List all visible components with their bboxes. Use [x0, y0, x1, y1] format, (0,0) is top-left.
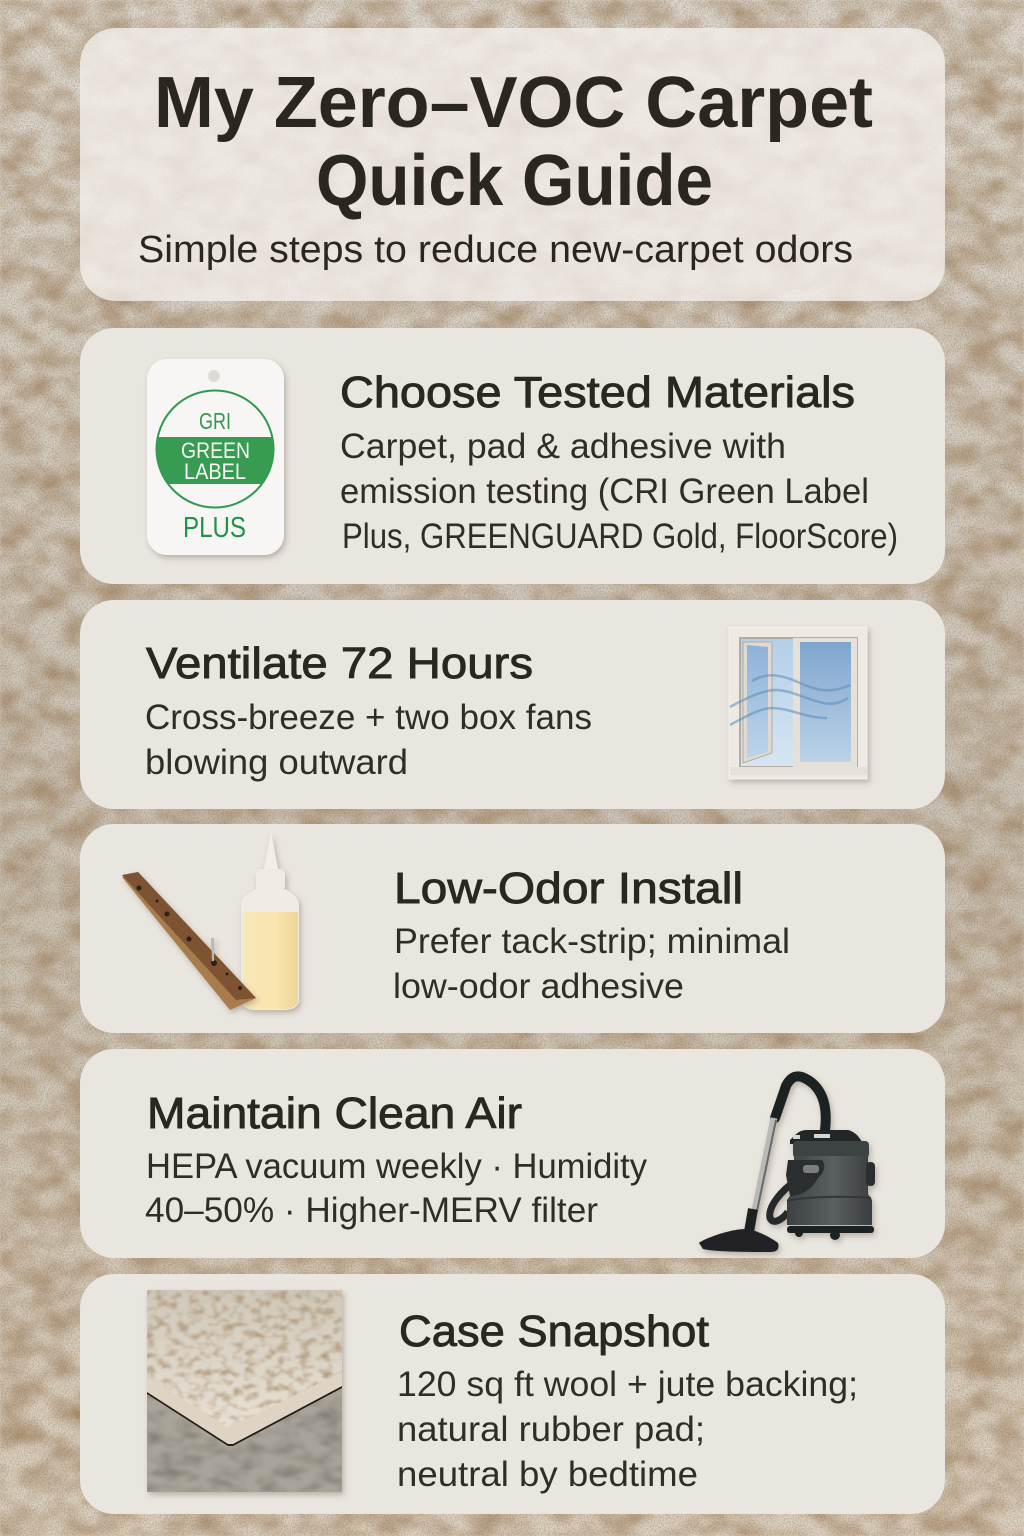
subtitle: Simple steps to reduce new-carpet odors — [138, 229, 853, 271]
body text: HEPA vacuum weekly · Humidity — [146, 1147, 647, 1186]
icon: vacuum cleaner — [699, 1076, 875, 1252]
panel: maintain clean air — [80, 1049, 945, 1258]
title — [154, 63, 873, 221]
image: carpet sample corner — [147, 1290, 342, 1492]
icon: green label tag: GRI — [199, 408, 231, 434]
panel: low-odor install — [80, 824, 945, 1033]
panel: choose tested materials — [80, 328, 945, 584]
icon: green label tag: LABEL — [184, 459, 246, 484]
icon: green label tag: PLUS — [183, 512, 246, 544]
heading: Maintain Clean Air — [147, 1089, 522, 1138]
heading: Ventilate 72 Hours — [146, 639, 533, 688]
icon: tack strip — [122, 872, 256, 1010]
title: Quick Guide — [316, 141, 713, 221]
body text — [340, 427, 898, 556]
body text: Carpet, pad & adhesive with — [340, 427, 786, 466]
body text: blowing outward — [145, 743, 408, 782]
title: My Zero–VOC Carpet — [154, 63, 873, 143]
body text — [393, 922, 790, 1006]
body text: natural rubber pad; — [397, 1410, 705, 1449]
body text — [397, 1365, 858, 1494]
heading: Choose Tested Materials — [340, 368, 855, 417]
panel: ventilate 72 hours — [80, 600, 945, 809]
icon: green label tag: GREEN — [181, 438, 250, 463]
icon: adhesive bottle — [241, 832, 299, 1010]
body text — [145, 1147, 647, 1230]
body text: Cross-breeze + two box fans — [145, 698, 592, 737]
heading: Low-Odor Install — [394, 864, 743, 913]
body text: 40–50% · Higher-MERV filter — [145, 1191, 598, 1230]
heading: Case Snapshot — [399, 1307, 709, 1356]
body text: Prefer tack-strip; minimal — [394, 922, 790, 961]
body text: neutral by bedtime — [397, 1455, 698, 1494]
body text: emission testing (CRI Green Label — [340, 472, 869, 511]
body text: low-odor adhesive — [393, 967, 684, 1006]
panel: title header — [80, 28, 945, 301]
body text: Plus, GREENGUARD Gold, FloorScore) — [342, 517, 898, 556]
body text: 120 sq ft wool + jute backing; — [397, 1365, 858, 1404]
icon: open window with breeze — [729, 627, 867, 779]
icon: green label tag — [147, 359, 284, 555]
panel: case snapshot — [80, 1274, 945, 1514]
body text — [145, 698, 592, 782]
